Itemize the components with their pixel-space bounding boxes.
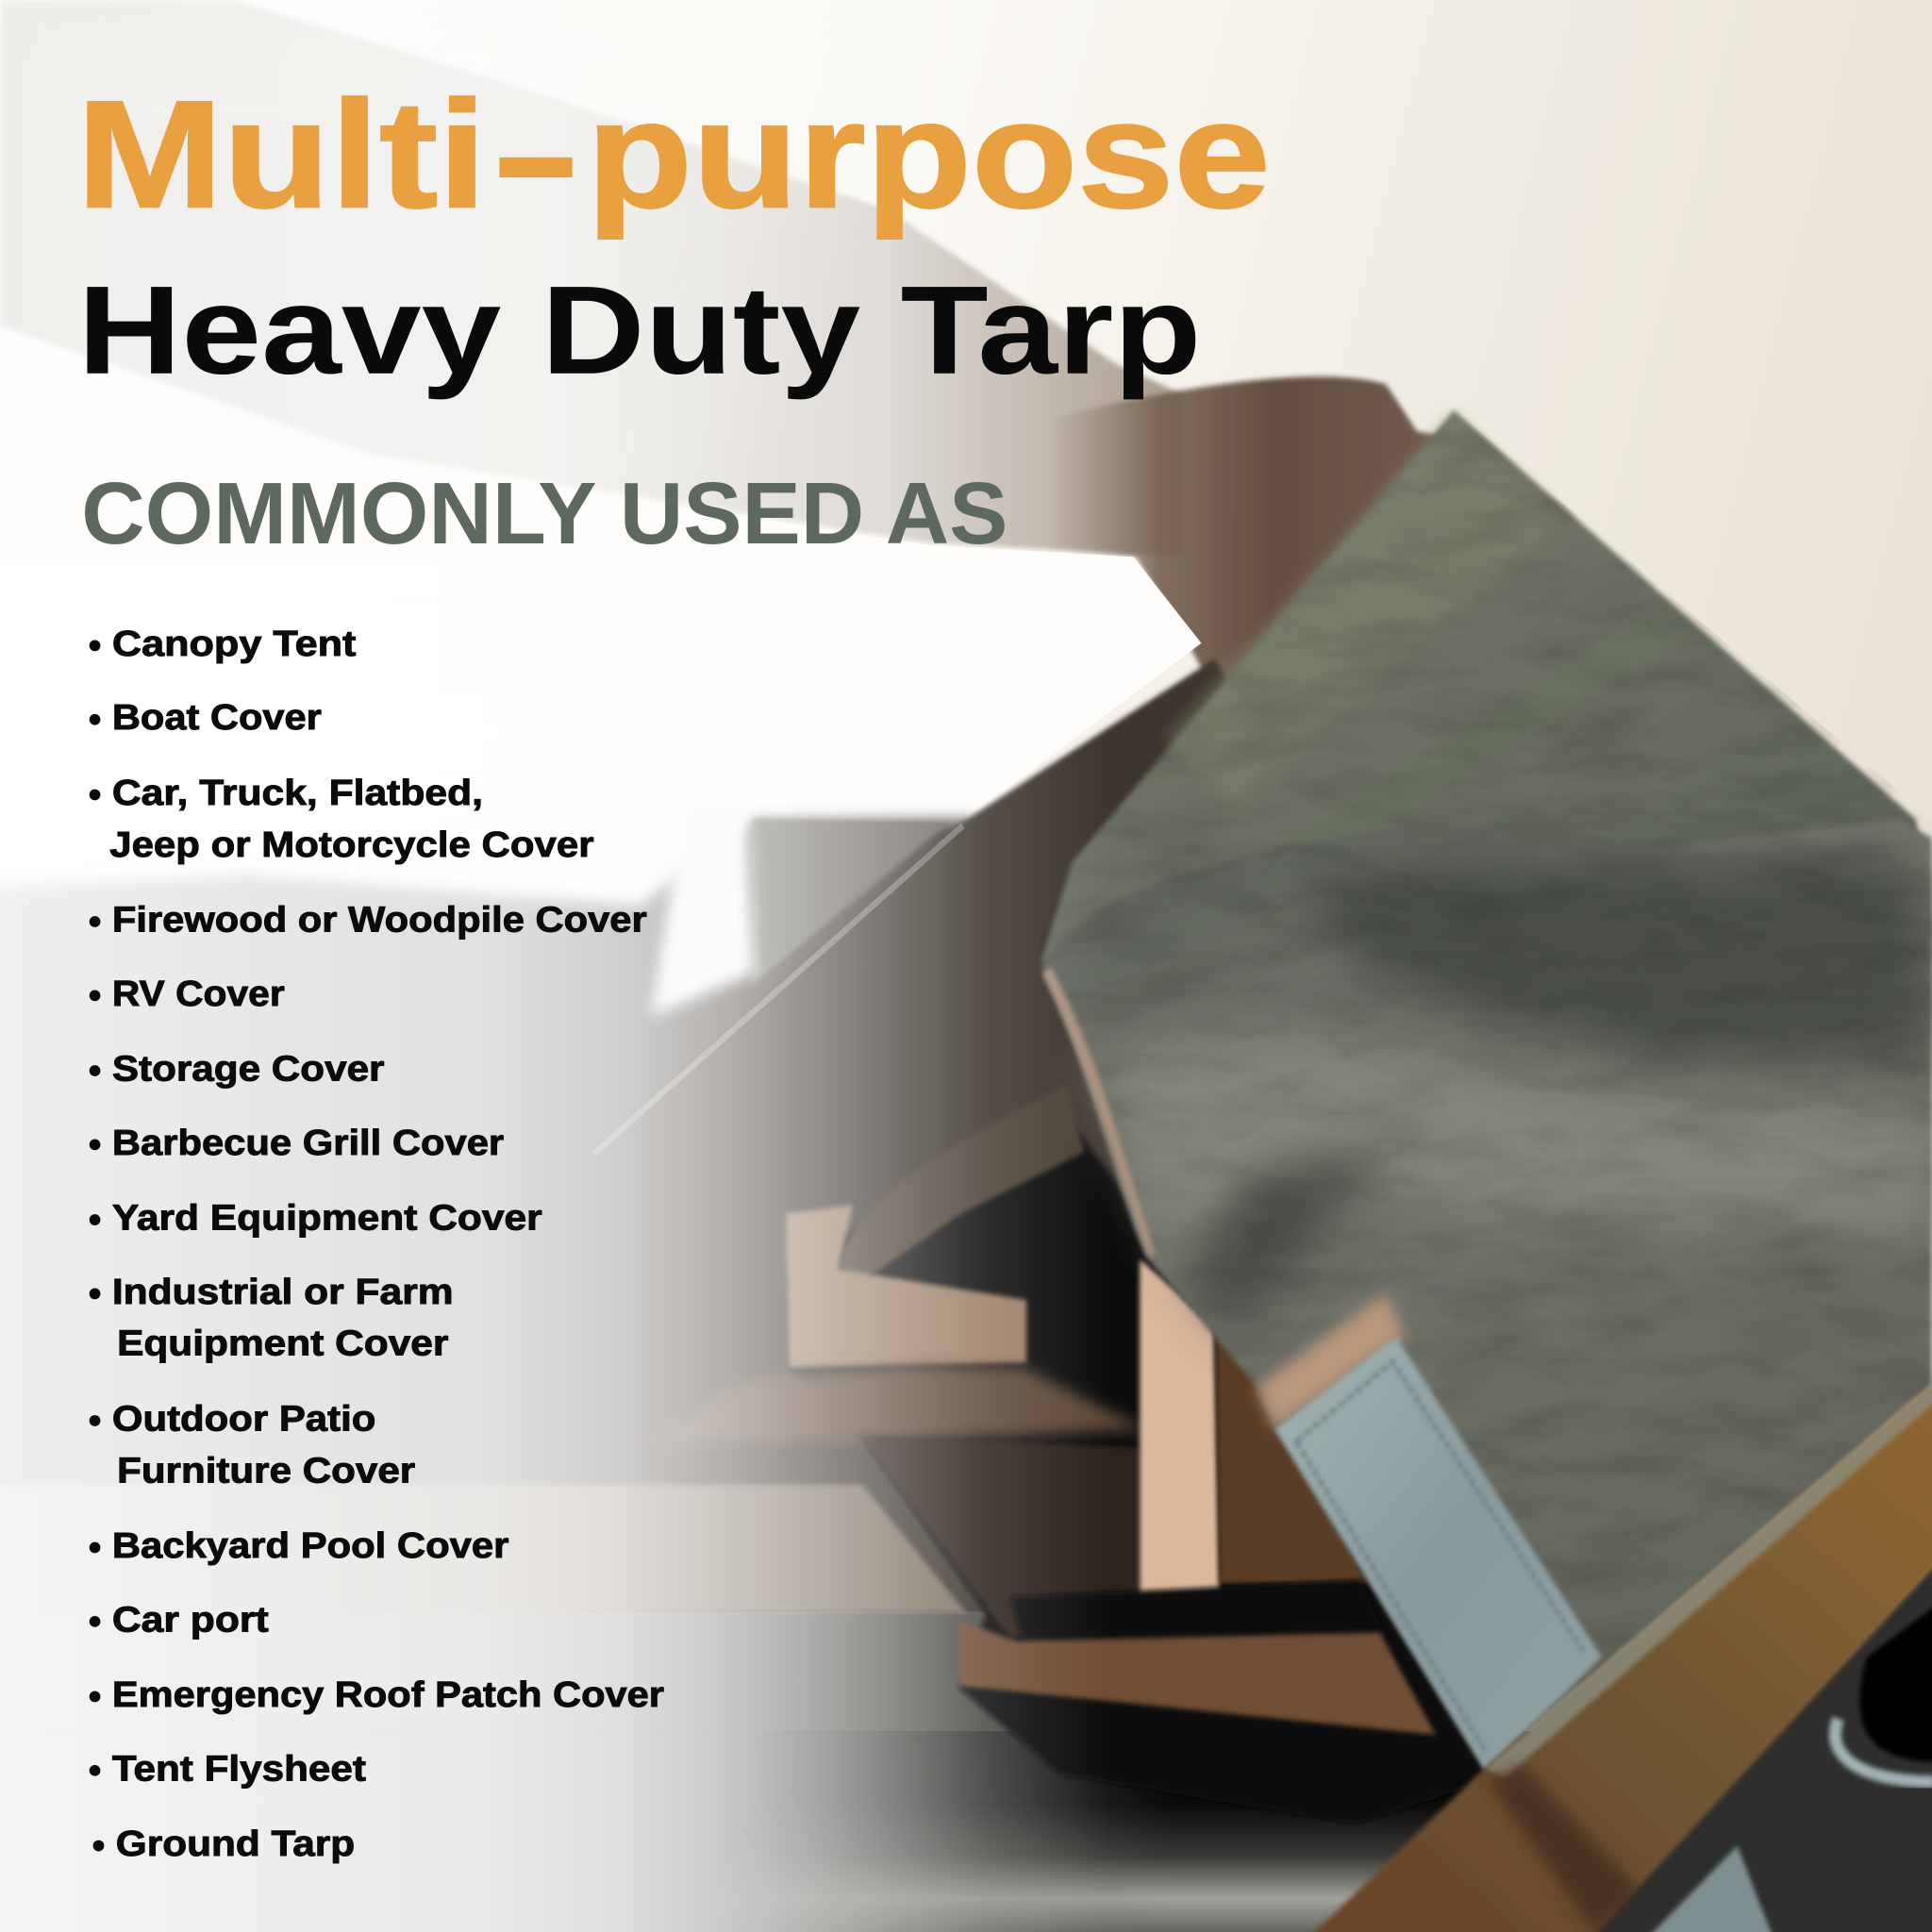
leather belt: [1306, 1377, 1932, 1932]
blue strip at bottom: [1645, 1846, 1774, 1932]
list of uses: [90, 625, 664, 1864]
item: ground tarp: Ground Tarp: [116, 1824, 355, 1864]
item: tent flysheet: Tent Flysheet: [112, 1749, 366, 1789]
item: industrial or farm equipment cover: Industrial or Farm: [112, 1273, 454, 1312]
item: yard equipment cover: Yard Equipment Cover: [112, 1199, 542, 1239]
top haze: [0, 0, 862, 789]
item: emergency roof patch cover: Emergency Roof Patch Cover: [112, 1675, 664, 1715]
item: car truck flatbed jeep motorcycle cover: Jeep or Motorcycle Cover: [109, 825, 594, 865]
item: canopy tent: Canopy Tent: [112, 625, 357, 664]
deep crease: [1183, 1146, 1392, 1343]
plank end: [786, 1205, 1026, 1368]
dark corner: [1577, 1555, 1932, 1932]
tarp main fold: [1041, 820, 1932, 1768]
item: boat cover: Boat Cover: [112, 698, 322, 738]
item: car truck flatbed jeep motorcycle cover: Car, Truck, Flatbed,: [112, 774, 483, 813]
rope: [838, 1084, 1084, 1281]
tarp top panel: [1041, 410, 1932, 961]
lower plank: [958, 1621, 1436, 1735]
tarp mottling: [1098, 430, 1932, 1679]
hand gripping tarp: [1047, 376, 1478, 690]
ground: [0, 1731, 1614, 1932]
pale ground on left: [0, 1731, 1171, 1932]
black eyelet hole: [1859, 1602, 1932, 1762]
dark timber stack: [789, 1109, 1509, 1824]
left white fade: [0, 560, 1109, 1932]
bright wood upright: [1140, 1259, 1220, 1624]
plank row: [653, 1365, 1146, 1441]
item: industrial or farm equipment cover: Equipment Cover: [117, 1324, 449, 1364]
weathered wood stack: [860, 1436, 1140, 1639]
item: storage cover: Storage Cover: [112, 1049, 385, 1089]
item: car port: Car port: [112, 1600, 269, 1640]
dark roof slope: [579, 659, 1356, 1725]
distant building: [752, 820, 949, 986]
metal ring: [1835, 1719, 1932, 1782]
fold highlight: [1084, 1035, 1932, 1244]
subtitle: Heavy Duty Tarp: Heavy Duty Tarp: [77, 260, 1201, 401]
frayed warm edge: [1042, 967, 1156, 1257]
blurred distance and tree line: [0, 820, 974, 1528]
title: Multi-purpose: Multi: [76, 69, 487, 240]
item: backyard pool cover: Backyard Pool Cover: [112, 1526, 509, 1566]
black bar: [1010, 1579, 1386, 1641]
reflective strap: [1275, 1337, 1602, 1771]
item: firewood cover: Firewood or Woodpile Cover: [112, 900, 647, 940]
brown timber side: [1216, 1328, 1368, 1583]
item: car truck flatbed jeep motorcycle cover: [90, 774, 594, 865]
heading: commonly used as: COMMONLY USED AS: [81, 464, 1008, 562]
mid ground band: [0, 1614, 1220, 1738]
sleeve of arm: [0, 0, 1183, 557]
fold shadow band: [1293, 850, 1932, 1059]
tarp hem seam: [1164, 413, 1565, 801]
item: barbecue grill cover: Barbecue Grill Cover: [112, 1124, 504, 1163]
item: rv cover: RV Cover: [112, 974, 285, 1014]
pale lower band: [0, 1485, 967, 1614]
building pillar: [651, 801, 754, 1017]
item: outdoor patio furniture cover: [90, 1399, 415, 1491]
title: Multi-purpose: purpose: [587, 69, 1271, 240]
item: outdoor patio furniture cover: Furniture Cover: [117, 1451, 415, 1491]
item: outdoor patio furniture cover: Outdoor Patio: [112, 1399, 375, 1439]
item: industrial or farm equipment cover: [90, 1273, 454, 1364]
title: Multi-purpose: -: [491, 69, 581, 240]
white haze below arm: [0, 333, 1201, 862]
